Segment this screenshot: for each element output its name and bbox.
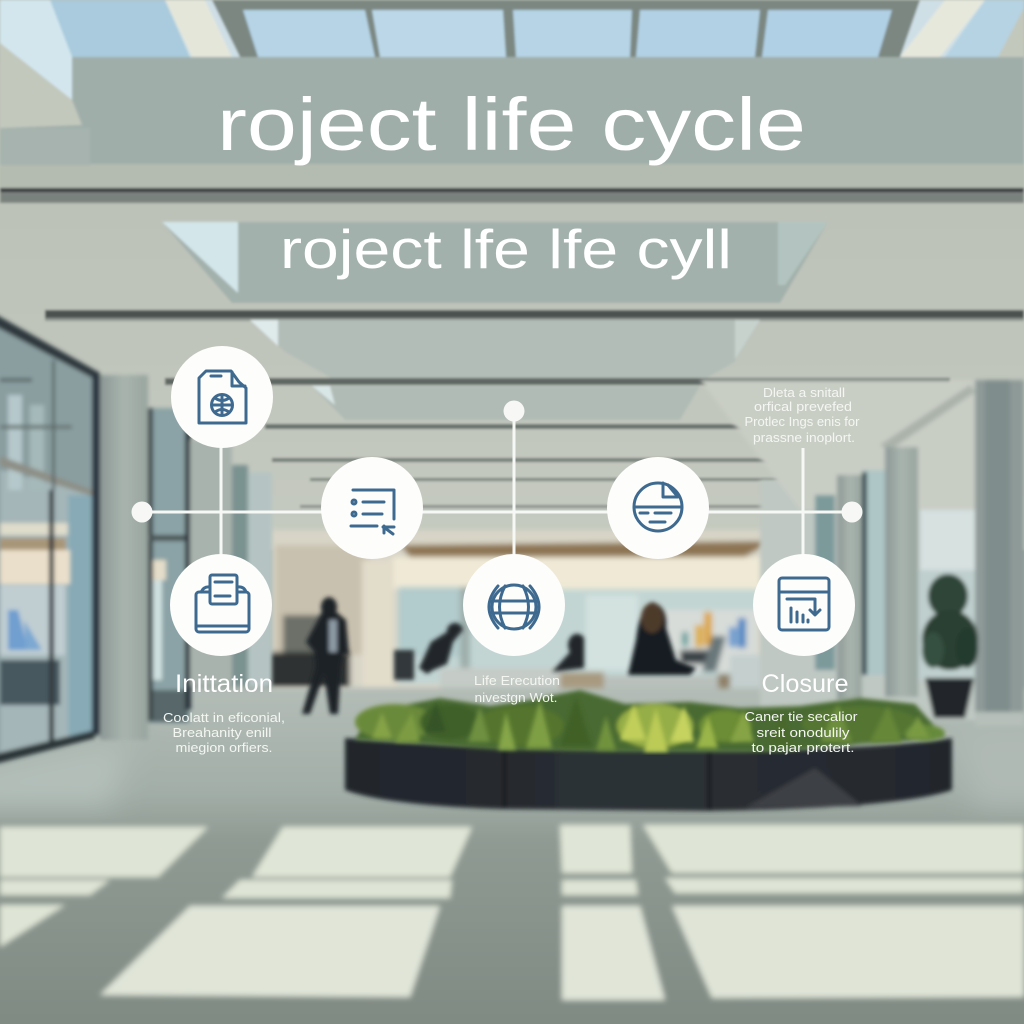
stage description: execution: nivestgn Wot. [474, 690, 558, 705]
stage label: Closure: Closure [762, 670, 848, 698]
stage description: closure [744, 709, 858, 755]
stage description: top right note: Protlec Ings enis for [744, 414, 860, 429]
stage description: initiation: Breahanity enill [172, 725, 272, 740]
stage description: initiation [163, 710, 285, 755]
stage description: closure: Caner tie secalior [744, 709, 858, 724]
icon: document with globe [171, 346, 273, 448]
stage description: initiation: miegion orfiers. [176, 740, 272, 755]
stage label: Initiation: Inittation [175, 670, 273, 698]
title beam [0, 57, 1024, 165]
back office room [268, 530, 810, 716]
stage description: closure: sreit onodulily [756, 725, 850, 740]
icon: calendar with chart [753, 554, 855, 656]
planter with foliage [345, 690, 952, 811]
floor with sunlight patches [0, 688, 1024, 1024]
icon: pie document circle [607, 457, 709, 559]
stage description: execution: Life Erecution [474, 673, 560, 688]
blurred people [302, 597, 696, 714]
timeline end dots [132, 400, 862, 522]
icon: folder with paper [170, 554, 272, 656]
right columns and windows [700, 380, 1024, 726]
left pillar [100, 375, 148, 740]
icon: checklist with cursor [321, 457, 423, 559]
recessed ceiling panel [162, 222, 828, 303]
potted plant [922, 574, 978, 718]
stage description: closure: to pajar protert. [752, 740, 854, 755]
stage description: top right note: orfical prevefed [754, 399, 852, 414]
stage description: top right note: Dleta a snitall [763, 385, 845, 400]
ceiling and upper wall [0, 0, 1024, 550]
stage description: initiation: Coolatt in eficonial, [163, 710, 285, 725]
left glass wall [0, 314, 272, 764]
stage description: top right note: prassne inoplort. [753, 430, 855, 445]
lounge furniture [440, 668, 560, 708]
stage description: top right note [744, 385, 860, 445]
chart on back wall [660, 610, 758, 672]
timeline connector lines [142, 411, 852, 556]
stage description: execution [474, 673, 560, 705]
secondary title: roject lfe lfe cyll [280, 218, 732, 280]
icon: globe [463, 554, 565, 656]
title: roject life cycle [217, 83, 806, 166]
